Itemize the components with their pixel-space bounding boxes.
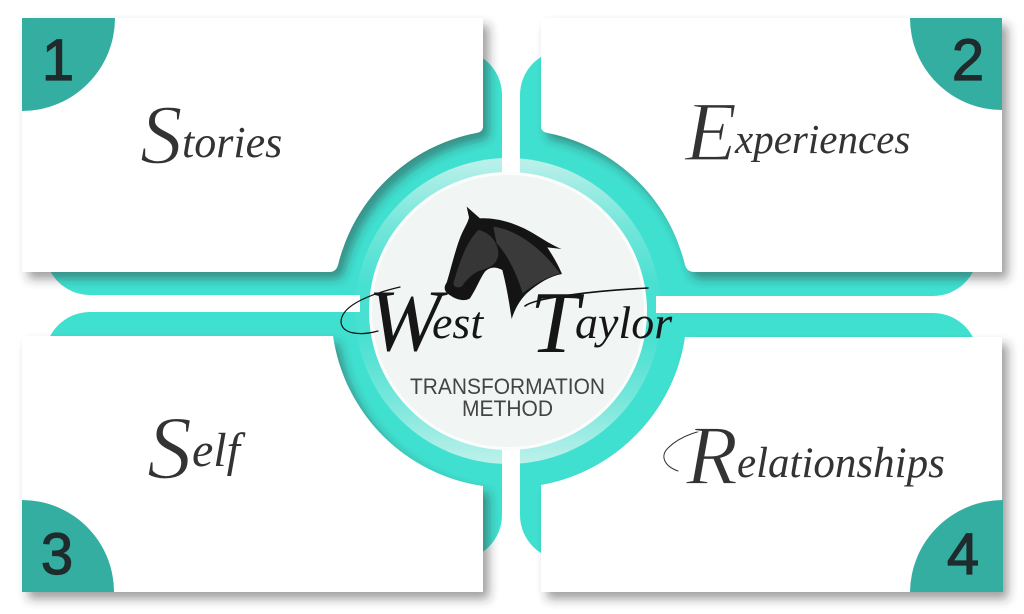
brand name: West Taylor: T bbox=[530, 275, 585, 372]
label: Relationships: R bbox=[685, 409, 738, 503]
number badge 1 bbox=[22, 18, 115, 111]
label: Stories: tories bbox=[182, 118, 282, 167]
panel: stories bbox=[22, 18, 483, 272]
label: Experiences: E bbox=[684, 85, 737, 179]
panel: relationships bbox=[541, 337, 1003, 592]
label: Self: S bbox=[147, 399, 192, 498]
teal backing shapes and central ring bbox=[45, 50, 978, 560]
label: Self: elf bbox=[192, 424, 246, 477]
brand name: West Taylor bbox=[341, 273, 673, 372]
number badge 4 bbox=[910, 500, 1003, 592]
subtitle: transformation method: METHOD bbox=[462, 396, 553, 421]
label: Relationships: elationships bbox=[737, 440, 945, 487]
brand name: West Taylor: est bbox=[432, 297, 484, 348]
number badge 3: 3 bbox=[41, 522, 73, 587]
brand name: West Taylor: aylor bbox=[575, 297, 673, 348]
panel: experiences bbox=[541, 18, 1002, 272]
label: Stories: S bbox=[140, 88, 182, 182]
icon: horse head bbox=[445, 207, 562, 319]
number badge 1: 1 bbox=[42, 28, 74, 93]
central logo disc bbox=[369, 172, 647, 450]
number badge 4: 4 bbox=[947, 522, 979, 587]
number badge 3 bbox=[22, 500, 114, 592]
label: Relationships bbox=[664, 409, 945, 503]
label: Experiences: xperiences bbox=[734, 116, 910, 162]
brand name: West Taylor: W bbox=[368, 273, 448, 370]
number badge 2 bbox=[910, 18, 1002, 110]
panel: self bbox=[22, 336, 483, 592]
subtitle: transformation method bbox=[410, 374, 605, 421]
subtitle: transformation method: TRANSFORMATION bbox=[410, 374, 605, 399]
number badge 2: 2 bbox=[952, 28, 984, 93]
